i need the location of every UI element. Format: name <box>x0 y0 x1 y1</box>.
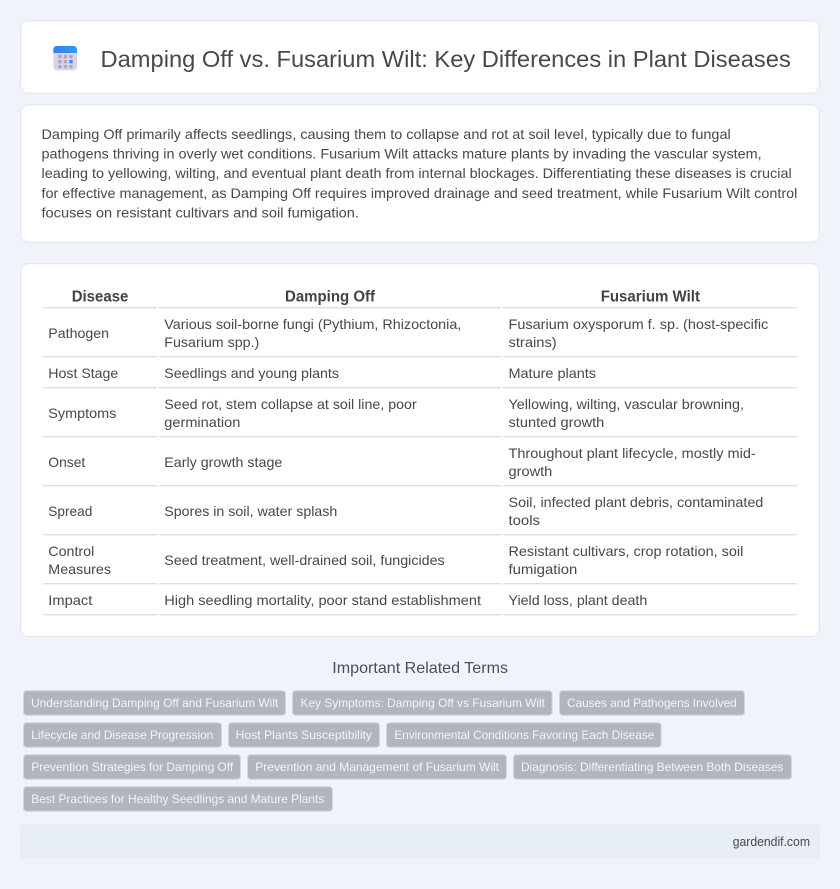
header panel <box>21 21 819 93</box>
row: spread: tools <box>508 512 540 528</box>
row: onset: growth <box>508 463 552 479</box>
row: control measures: Control <box>48 543 94 559</box>
row: onset: Throughout plant lifecycle, mostly mid- <box>508 445 756 461</box>
tag <box>24 787 332 811</box>
tag: Understanding Damping Off and Fusarium Wilt <box>31 696 279 710</box>
row: onset: Onset <box>48 454 85 470</box>
tag <box>24 755 240 779</box>
row: spread: Spores in soil, water splash <box>164 503 337 519</box>
row: impact <box>48 592 647 608</box>
tag: Prevention and Management of Fusarium Wilt <box>255 760 500 774</box>
row: impact: Impact <box>48 592 92 608</box>
tag: Lifecycle and Disease Progression <box>31 728 213 742</box>
intro paragraph: for effective management, as Damping Off requires improved drainage and seed treatment, while Fusarium Wilt control <box>42 185 797 201</box>
intro paragraph <box>42 126 797 220</box>
tag: Key Symptoms: Damping Off vs Fusarium Wilt <box>300 696 546 710</box>
row: spread: Soil, infected plant debris, contaminated <box>508 494 763 510</box>
row: symptoms: Yellowing, wilting, vascular browning, <box>508 396 744 412</box>
icon: calendar <box>53 46 77 70</box>
footer site name: gardendif.com <box>733 834 810 849</box>
row: symptoms: germination <box>164 414 240 430</box>
row: control measures: Measures <box>48 561 111 577</box>
row: pathogen: Various soil-borne fungi (Pythium, Rhizoctonia, <box>164 316 461 332</box>
panel: intro summary <box>21 105 819 242</box>
title: Damping Off vs. Fusarium Wilt: Key Differences in Plant Diseases <box>100 46 791 72</box>
tag: Host Plants Susceptibility <box>236 728 372 742</box>
row: pathogen: Fusarium oxysporum f. sp. (host-specific <box>508 316 768 332</box>
row: symptoms: Seed rot, stem collapse at soil line, poor <box>164 396 417 412</box>
tag: Prevention Strategies for Damping Off <box>31 760 234 774</box>
row: control measures: Resistant cultivars, crop rotation, soil <box>508 543 743 559</box>
row: pathogen: strains) <box>508 334 557 350</box>
intro paragraph: Damping Off primarily affects seedlings, causing them to collapse and rot at soil level, typically due to fungal <box>42 126 731 142</box>
table header row: Disease <box>72 288 129 306</box>
tag <box>514 755 792 779</box>
tag <box>560 691 744 715</box>
row: host stage: Host Stage <box>48 365 119 381</box>
footer bar <box>20 825 820 859</box>
tag: Environmental Conditions Favoring Each Disease <box>394 728 655 742</box>
row: pathogen <box>48 316 768 350</box>
row: spread <box>48 494 763 528</box>
tag <box>248 755 506 779</box>
heading: important related terms: Important Related Terms <box>332 660 508 677</box>
row: symptoms: Symptoms <box>48 405 116 421</box>
row: control measures: fumigation <box>508 561 577 577</box>
tag <box>228 723 380 747</box>
tag: Causes and Pathogens Involved <box>567 696 737 710</box>
panel: comparison table <box>21 264 819 637</box>
row: host stage: Seedlings and young plants <box>164 365 339 381</box>
row: pathogen: Pathogen <box>48 325 109 341</box>
row: onset: Early growth stage <box>164 454 283 470</box>
intro paragraph: focuses on resistant cultivars and soil fumigation. <box>42 204 359 220</box>
tag <box>24 691 286 715</box>
row: symptoms: stunted growth <box>508 414 604 430</box>
intro paragraph: pathogens thriving in overly wet conditions. Fusarium Wilt attacks mature plants by invading the vascular system, <box>42 146 762 162</box>
row: spread: Spread <box>48 503 92 519</box>
intro paragraph: leading to yellowing, wilting, and eventual plant death from internal blockages. Differentiating these diseases is crucial <box>42 165 792 181</box>
tag: Diagnosis: Differentiating Between Both Diseases <box>521 760 783 774</box>
row: host stage: Mature plants <box>508 365 596 381</box>
tag: Best Practices for Healthy Seedlings and Mature Plants <box>31 792 324 806</box>
tag <box>386 723 661 747</box>
row: impact: High seedling mortality, poor stand establishment <box>164 592 481 608</box>
row: symptoms <box>48 396 744 430</box>
table header row <box>72 288 700 306</box>
row: onset <box>48 445 756 479</box>
row: impact: Yield loss, plant death <box>508 592 647 608</box>
table header row: Fusarium Wilt <box>601 288 700 306</box>
tag <box>292 691 552 715</box>
table header row: Damping Off <box>285 288 376 306</box>
tag <box>24 723 222 747</box>
related term tags <box>24 691 792 811</box>
row: control measures: Seed treatment, well-drained soil, fungicides <box>164 552 445 568</box>
row: pathogen: Fusarium spp.) <box>164 334 259 350</box>
row: host stage <box>48 365 596 381</box>
row: control measures <box>48 543 743 577</box>
